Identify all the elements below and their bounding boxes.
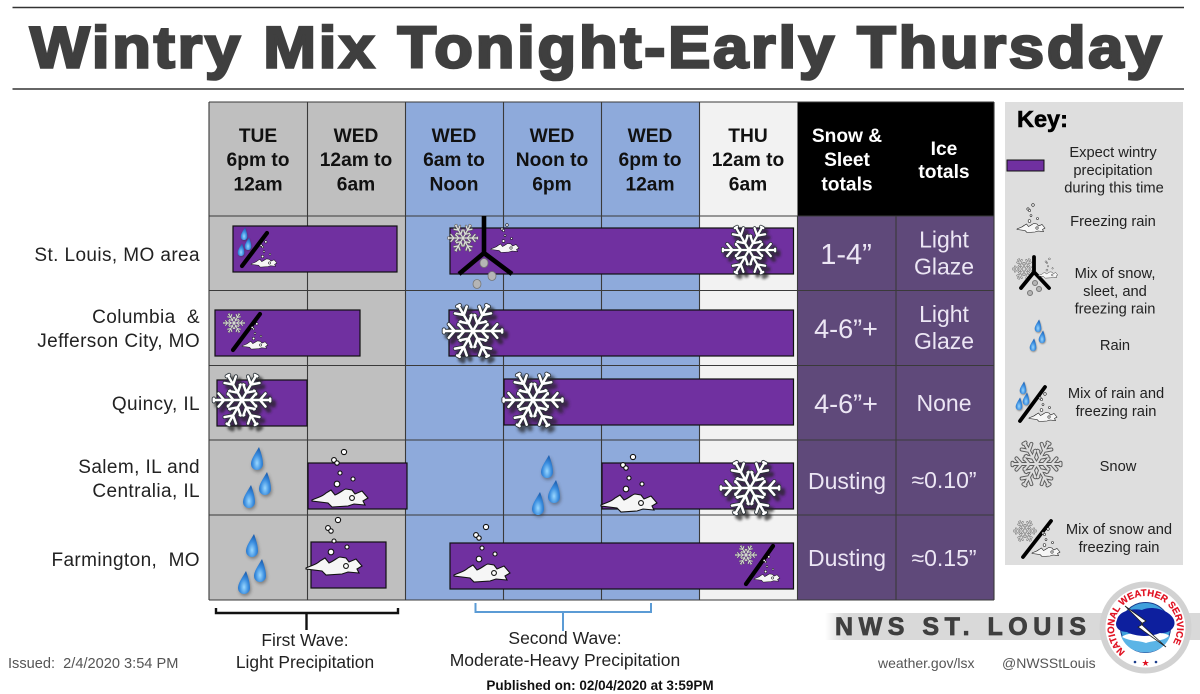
NWS St. Louis banner <box>825 613 1200 641</box>
icons: St. Louis row <box>238 215 787 289</box>
key labels: precipitation <box>1073 163 1153 179</box>
totals values <box>808 226 977 571</box>
bracket: second wave <box>476 603 651 631</box>
column headings: Noon <box>429 174 479 196</box>
title: Wintry Mix Tonight-Early Thursday <box>30 15 1162 80</box>
column headings: totals <box>918 162 970 183</box>
web address and handle <box>877 655 1096 671</box>
key labels: Expect wintry <box>1069 145 1157 161</box>
bracket: first wave <box>216 608 398 630</box>
key heading: Key: <box>1017 106 1068 132</box>
key labels: freezing rain <box>1076 404 1156 420</box>
key labels: Snow <box>1100 459 1137 475</box>
location labels: St. Louis, MO area <box>34 245 200 266</box>
key labels: during this time <box>1064 180 1164 196</box>
NWS logo <box>1101 582 1190 674</box>
key labels: Mix of rain and <box>1068 386 1164 402</box>
key labels: Freezing rain <box>1070 214 1156 230</box>
first wave caption: First Wave: <box>261 630 349 650</box>
column headings: totals <box>821 174 873 196</box>
column headings <box>227 126 970 196</box>
column headings: 12am <box>625 174 675 196</box>
location labels: Farmington, MO <box>51 550 200 571</box>
first wave caption <box>236 630 374 672</box>
column headings: WED <box>432 126 477 147</box>
key labels <box>1064 145 1172 556</box>
column headings: WED <box>628 126 673 147</box>
totals values: None <box>917 390 971 416</box>
location labels: Salem, IL and <box>78 457 200 478</box>
column headings: Sleet <box>824 150 871 171</box>
totals values: 4-6”+ <box>814 314 878 344</box>
published time: Published on: 02/04/2020 at 3:59PM <box>486 678 714 693</box>
key icon: rain <box>1030 319 1046 352</box>
column headings: Ice <box>931 139 958 160</box>
totals values: Glaze <box>914 328 974 354</box>
column headings: WED <box>530 126 575 147</box>
key icon: mix of snow, sleet, freezing rain <box>1009 254 1058 296</box>
totals values: Light <box>919 226 970 252</box>
column headings: 12am to <box>320 150 392 171</box>
location labels <box>34 245 200 571</box>
icons: Farmington row <box>238 517 780 596</box>
column headings: 6am <box>729 174 767 196</box>
web address and handle: weather.gov/lsx <box>877 655 974 671</box>
key icon: mix of rain and freezing rain <box>1016 381 1057 422</box>
column headings: Noon to <box>516 150 588 171</box>
totals values: ≈0.10” <box>911 467 977 493</box>
key bar sample <box>1007 160 1044 171</box>
column headings: 12am <box>233 174 283 196</box>
location labels: Centralia, IL <box>92 481 200 502</box>
location labels: Jefferson City, MO <box>37 331 200 352</box>
icons: Columbia row <box>220 292 516 374</box>
icons: Salem row <box>243 447 793 531</box>
column headings: 6am <box>337 174 375 196</box>
key labels: Mix of snow, <box>1075 266 1155 282</box>
totals values: 1-4” <box>820 239 872 271</box>
totals values: Dusting <box>808 545 886 571</box>
key labels: Mix of snow and <box>1066 522 1172 538</box>
NWS logo: NATIONAL WEATHER SERVICE <box>1107 589 1184 656</box>
icons: Quincy row <box>204 360 576 444</box>
issued time: Issued: 2/4/2020 3:54 PM <box>8 656 178 672</box>
key icon: freezing rain <box>1017 204 1045 232</box>
second wave caption: Moderate-Heavy Precipitation <box>450 650 680 670</box>
key icon: mix of snow and freezing rain <box>1010 516 1060 557</box>
timeline grid <box>209 102 994 600</box>
first wave caption: Light Precipitation <box>236 652 374 672</box>
key icon: snow <box>1004 431 1069 497</box>
column headings: 6pm <box>532 174 572 196</box>
key labels: freezing rain <box>1079 540 1159 556</box>
precipitation bars <box>215 226 794 589</box>
column headings: TUE <box>239 126 277 147</box>
totals values: ≈0.15” <box>911 545 977 571</box>
column headings: 6am to <box>423 150 485 171</box>
column headings: 6pm to <box>227 150 289 171</box>
panel: key <box>1004 102 1183 565</box>
NWS St. Louis banner: NWS ST. LOUIS <box>835 613 1086 641</box>
location labels: Columbia & <box>92 307 200 328</box>
column headings: 12am to <box>712 150 784 171</box>
NWS logo: ★ <box>1141 658 1150 668</box>
column headings: WED <box>334 126 379 147</box>
column headings: 6pm to <box>619 150 681 171</box>
column headings: THU <box>728 126 768 147</box>
second wave caption: Second Wave: <box>508 628 622 648</box>
key labels: Rain <box>1100 338 1130 354</box>
second wave caption <box>450 628 680 670</box>
key labels: freezing rain <box>1075 302 1155 318</box>
totals values: Light <box>919 301 970 327</box>
column headings: Snow & <box>812 126 882 147</box>
totals values: Dusting <box>808 468 886 494</box>
web address and handle: @NWSStLouis <box>1002 655 1096 671</box>
totals values: Glaze <box>914 254 974 280</box>
totals values: 4-6”+ <box>814 389 878 419</box>
location labels: Quincy, IL <box>112 394 200 415</box>
key labels: sleet, and <box>1083 284 1147 300</box>
